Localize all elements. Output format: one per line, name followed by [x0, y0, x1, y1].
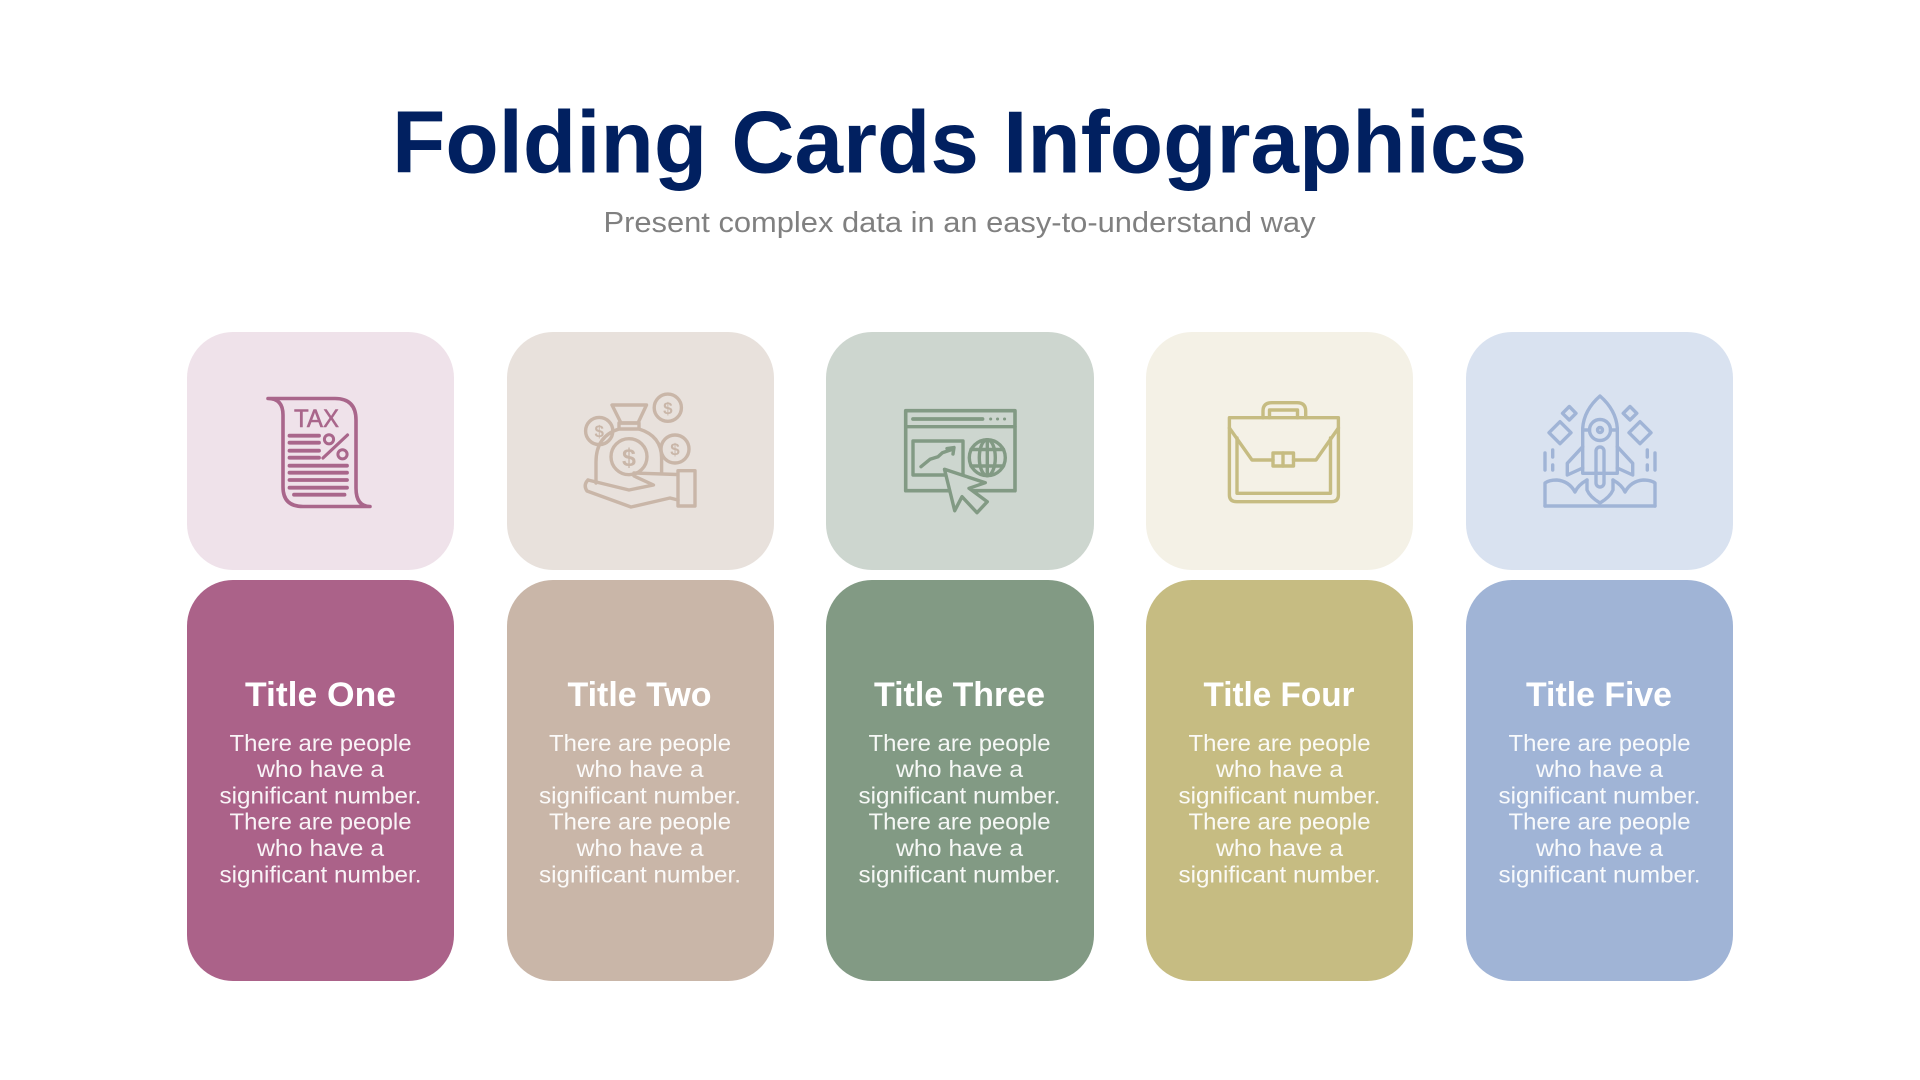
heading four: Title Four: [1204, 676, 1354, 714]
icon tile one: [187, 332, 454, 570]
heading two: Title Two: [568, 676, 712, 714]
body text two: There are people: [549, 808, 731, 834]
body text one: There are people: [230, 808, 412, 834]
body text one: significant number.: [220, 862, 422, 888]
body text one: significant number.: [220, 782, 422, 808]
body text one: [220, 730, 422, 888]
icon tile three: [826, 332, 1094, 570]
heading one: Title One: [245, 676, 396, 714]
body text four: who have a: [1215, 835, 1343, 861]
body text three: [858, 730, 1060, 888]
body text two: significant number.: [539, 782, 741, 808]
body text two: who have a: [575, 756, 704, 782]
heading three: Title Three: [874, 676, 1045, 714]
body text three: who have a: [895, 756, 1023, 782]
icon: money bag in hand: $: [622, 444, 636, 472]
icon: briefcase: [1229, 403, 1338, 502]
color card one: [187, 580, 454, 981]
color card five: [1466, 580, 1733, 981]
icon: rocket launch: [1545, 396, 1655, 506]
body text five: significant number.: [1498, 862, 1700, 888]
body text two: significant number.: [539, 862, 741, 888]
body text three: significant number.: [858, 782, 1060, 808]
icon: money bag in hand: [585, 394, 695, 507]
panel: card four: [1146, 332, 1413, 981]
icon tile four: [1146, 332, 1413, 570]
body text two: There are people: [549, 730, 731, 756]
icon: money bag in hand: $: [663, 399, 673, 418]
body text four: significant number.: [1178, 782, 1380, 808]
title: Folding Cards Infographics: [392, 92, 1527, 192]
panel: card two: [507, 332, 774, 981]
icon: tax document: TAX: [294, 405, 339, 433]
panel: card one: [187, 332, 454, 981]
icon: money bag in hand: $: [670, 440, 680, 459]
body text three: There are people: [868, 808, 1050, 834]
panel: card five: [1466, 332, 1733, 981]
body text one: who have a: [256, 756, 384, 782]
icon: browser with chart and cursor: [906, 411, 1015, 513]
subtitle: Present complex data in an easy-to-understand way: [604, 207, 1316, 239]
color card four: [1146, 580, 1413, 981]
body text five: significant number.: [1498, 782, 1700, 808]
icon tile two: [507, 332, 774, 570]
body text one: There are people: [230, 730, 412, 756]
body text three: who have a: [895, 835, 1023, 861]
body text three: There are people: [868, 730, 1050, 756]
body text four: [1178, 730, 1380, 888]
body text five: who have a: [1535, 835, 1663, 861]
body text two: [539, 730, 741, 888]
icon tile five: [1466, 332, 1733, 570]
body text five: who have a: [1535, 756, 1663, 782]
icon: money bag in hand: $: [594, 422, 604, 441]
color card three: [826, 580, 1094, 981]
body text one: who have a: [256, 835, 384, 861]
body text four: significant number.: [1178, 862, 1380, 888]
panel: card three: [826, 332, 1094, 981]
body text three: significant number.: [858, 862, 1060, 888]
color card two: [507, 580, 774, 981]
body text four: who have a: [1215, 756, 1343, 782]
heading five: Title Five: [1526, 676, 1672, 714]
body text five: There are people: [1508, 808, 1690, 834]
body text five: [1498, 730, 1700, 888]
body text four: There are people: [1188, 808, 1370, 834]
body text four: There are people: [1188, 730, 1370, 756]
body text five: There are people: [1508, 730, 1690, 756]
icon: tax document: [268, 398, 370, 506]
body text two: who have a: [575, 835, 704, 861]
